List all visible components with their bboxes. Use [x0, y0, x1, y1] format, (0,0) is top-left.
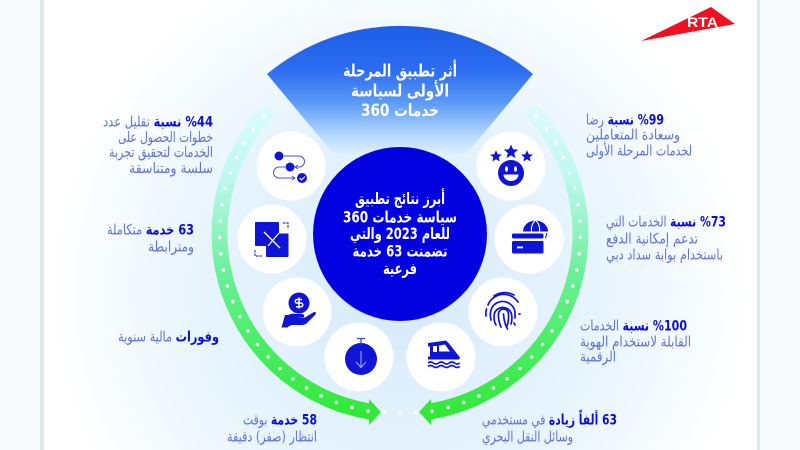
text: 44 percent fewer steps: %44 نسبة تقليل عدد — [103, 114, 213, 130]
text: 100 percent digital identity: القابلة لاستخدام الهوية — [580, 334, 691, 350]
text: 44 percent fewer steps — [103, 114, 213, 177]
title: الأولى لسياسة — [351, 80, 449, 102]
text: 100 percent digital identity: الرقمية — [580, 350, 616, 366]
central text — [343, 188, 457, 278]
text: 63 integrated services: 63 خدمة متكاملة — [107, 222, 194, 238]
central text: للعام 2023 والتي — [350, 224, 450, 244]
text: 73 percent payment gateway — [606, 214, 726, 264]
text: 63 integrated services: ومترابطة — [148, 240, 194, 256]
central text: سياسة خدمات 360 — [343, 208, 457, 226]
RTA logo: RTA — [687, 14, 718, 30]
text: 99 percent satisfaction: لخدمات المرحلة الأولى — [586, 142, 692, 160]
text: 58 zero wait services: انتظار (صفر) دقيقة — [227, 430, 317, 446]
text: 44 percent fewer steps: الخدمات لتحقيق تجربة — [109, 145, 213, 161]
text: 73 percent payment gateway: باستخدام بوابة سداد دبي — [606, 248, 723, 264]
left arrow — [220, 109, 381, 425]
text: 44 percent fewer steps: سلسة ومتناسقة — [129, 161, 213, 177]
central text: فرعية — [383, 259, 417, 278]
text: 58 zero wait services — [227, 412, 317, 446]
icon: stopwatch — [324, 322, 394, 392]
icon: integrated blocks — [238, 204, 306, 274]
text: 73 percent payment gateway: تدعم إمكانية الدفع — [606, 232, 698, 248]
text: 58 zero wait services: 58 خدمة بوقت — [243, 412, 317, 428]
text: 44 percent fewer steps: خطوات الحصول على — [118, 130, 213, 146]
icon: hand with coin — [262, 278, 332, 346]
text: annual savings: وفورات مالية سنوية — [118, 330, 219, 346]
text: 100 percent digital identity — [580, 318, 691, 366]
text: 100 percent digital identity: %100 نسبة الخدمات — [580, 318, 687, 334]
icon: process flow — [256, 132, 326, 200]
icon: card and umbrella — [494, 204, 564, 274]
fan title panel — [267, 26, 533, 234]
text: 63 thousand marine users — [482, 409, 617, 446]
right arrow — [419, 109, 580, 425]
icon: fingerprint — [468, 278, 538, 346]
text: 99 percent satisfaction: %99 نسبة رضا — [586, 112, 664, 128]
icon: water bus — [406, 322, 476, 392]
text: 99 percent satisfaction: وسعادة المتعاملين — [586, 128, 680, 144]
central text: تضمنت 63 خدمة — [352, 242, 448, 260]
text: 63 thousand marine users: 63 ألفاً زيادة في مستخدمي — [482, 409, 617, 428]
central circle — [313, 147, 487, 321]
icon: smiling face and stars — [476, 132, 546, 200]
text: 63 integrated services — [107, 222, 194, 256]
text: 63 thousand marine users: وسائل النقل البحري — [482, 430, 573, 446]
title: أثر تطبيق المرحلة — [343, 60, 457, 82]
RTA logo — [641, 7, 735, 41]
title — [343, 60, 457, 121]
text: 99 percent satisfaction — [586, 112, 692, 160]
title: خدمات 360 — [361, 101, 439, 121]
text: 73 percent payment gateway: %73 نسبة الخدمات التي — [606, 214, 726, 230]
green circular arrows — [220, 109, 580, 425]
central text: أبرز نتائج تطبيق — [355, 188, 445, 208]
